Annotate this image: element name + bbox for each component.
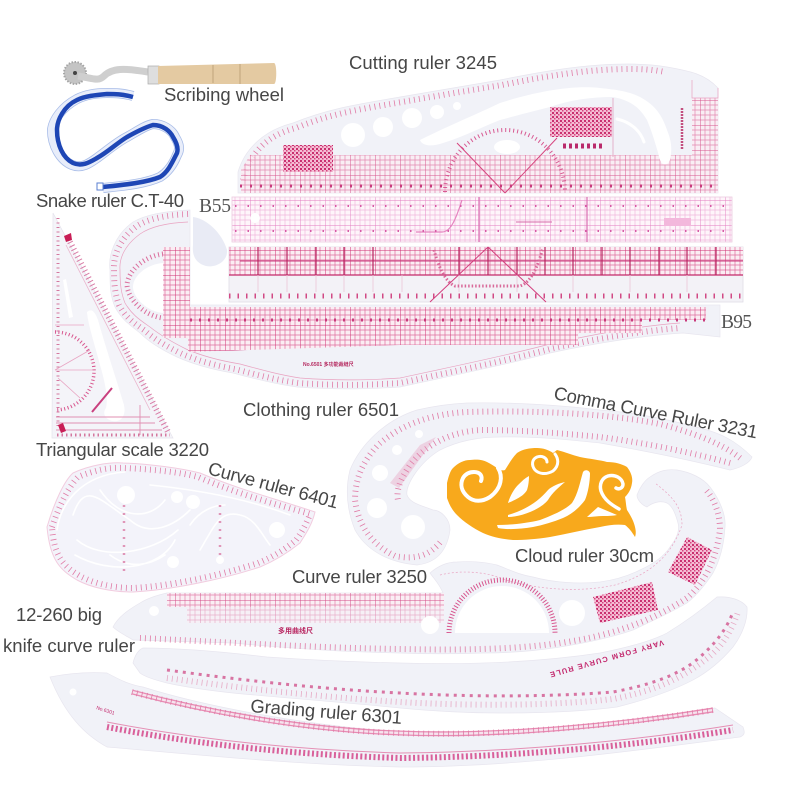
panel: ruler B95 xyxy=(229,247,743,302)
triangular scale cut slots xyxy=(63,279,124,421)
triangular scale protractor xyxy=(55,325,94,410)
panel: ruler B55 xyxy=(232,197,732,242)
panel: comma curve ruler 3231 xyxy=(347,403,752,565)
blob end xyxy=(193,217,227,266)
cloud ruler cutouts xyxy=(461,454,623,529)
label: cutting ruler: Cutting ruler 3245 xyxy=(349,52,497,73)
protractor xyxy=(445,130,565,193)
label: comma curve ruler: Comma Curve Ruler 3231 xyxy=(552,382,759,442)
label: triangular scale: Triangular scale 3220 xyxy=(36,439,209,460)
label: grading ruler: Grading ruler 6301 xyxy=(250,695,403,728)
outer scale xyxy=(114,214,680,385)
label: knife curve ruler: knife curve ruler xyxy=(3,635,135,656)
label: cloud ruler: Cloud ruler 30cm xyxy=(515,545,654,566)
panel: grading ruler 6301: No.6301 xyxy=(95,705,115,717)
inner ring scale and cutout xyxy=(127,254,163,318)
label: 12-260 big: 12-260 big xyxy=(16,604,102,625)
panel: scribing wheel xyxy=(64,62,276,84)
label: snake ruler: Snake ruler C.T-40 xyxy=(36,190,184,211)
label: clothing ruler: Clothing ruler 6501 xyxy=(243,399,399,420)
label: curve ruler 6401: Curve ruler 6401 xyxy=(206,458,341,513)
B95 centre curve marks xyxy=(430,247,546,302)
label: scribing wheel: Scribing wheel xyxy=(164,84,284,105)
label: B55: B55 xyxy=(199,196,231,217)
triangular scale base lines xyxy=(56,405,170,435)
panel: grading ruler 6301 xyxy=(50,673,744,767)
panel: curve ruler 6401 xyxy=(47,463,315,592)
grid region xyxy=(241,98,718,193)
panel: clothing ruler 6501 xyxy=(110,210,720,389)
grid block of curve ruler 3250 xyxy=(167,593,444,623)
label: B95: B95 xyxy=(721,312,752,333)
panel: curve ruler 3250 xyxy=(113,470,725,654)
L-shaped grid xyxy=(163,247,706,352)
panel: knife curve ruler 12-260: VARY FORM CURVE RULE xyxy=(549,638,665,679)
label: curve ruler 3250: Curve ruler 3250 xyxy=(292,566,427,587)
panel: cutting ruler 3245 xyxy=(238,64,718,193)
panel: clothing ruler 6501: No.6501 多功能裁缝尺 xyxy=(303,361,354,368)
panel: triangular scale 3220 xyxy=(52,213,173,438)
panel: knife curve ruler 12-260 xyxy=(133,597,747,713)
panel: snake ruler C.T-40 xyxy=(52,93,179,190)
curved slot xyxy=(420,87,671,164)
panel: cloud ruler 30cm xyxy=(447,448,636,540)
panel: curve ruler 3250: 多用曲线尺 xyxy=(278,626,313,636)
semicircle cutout with protractor scale xyxy=(449,580,555,633)
